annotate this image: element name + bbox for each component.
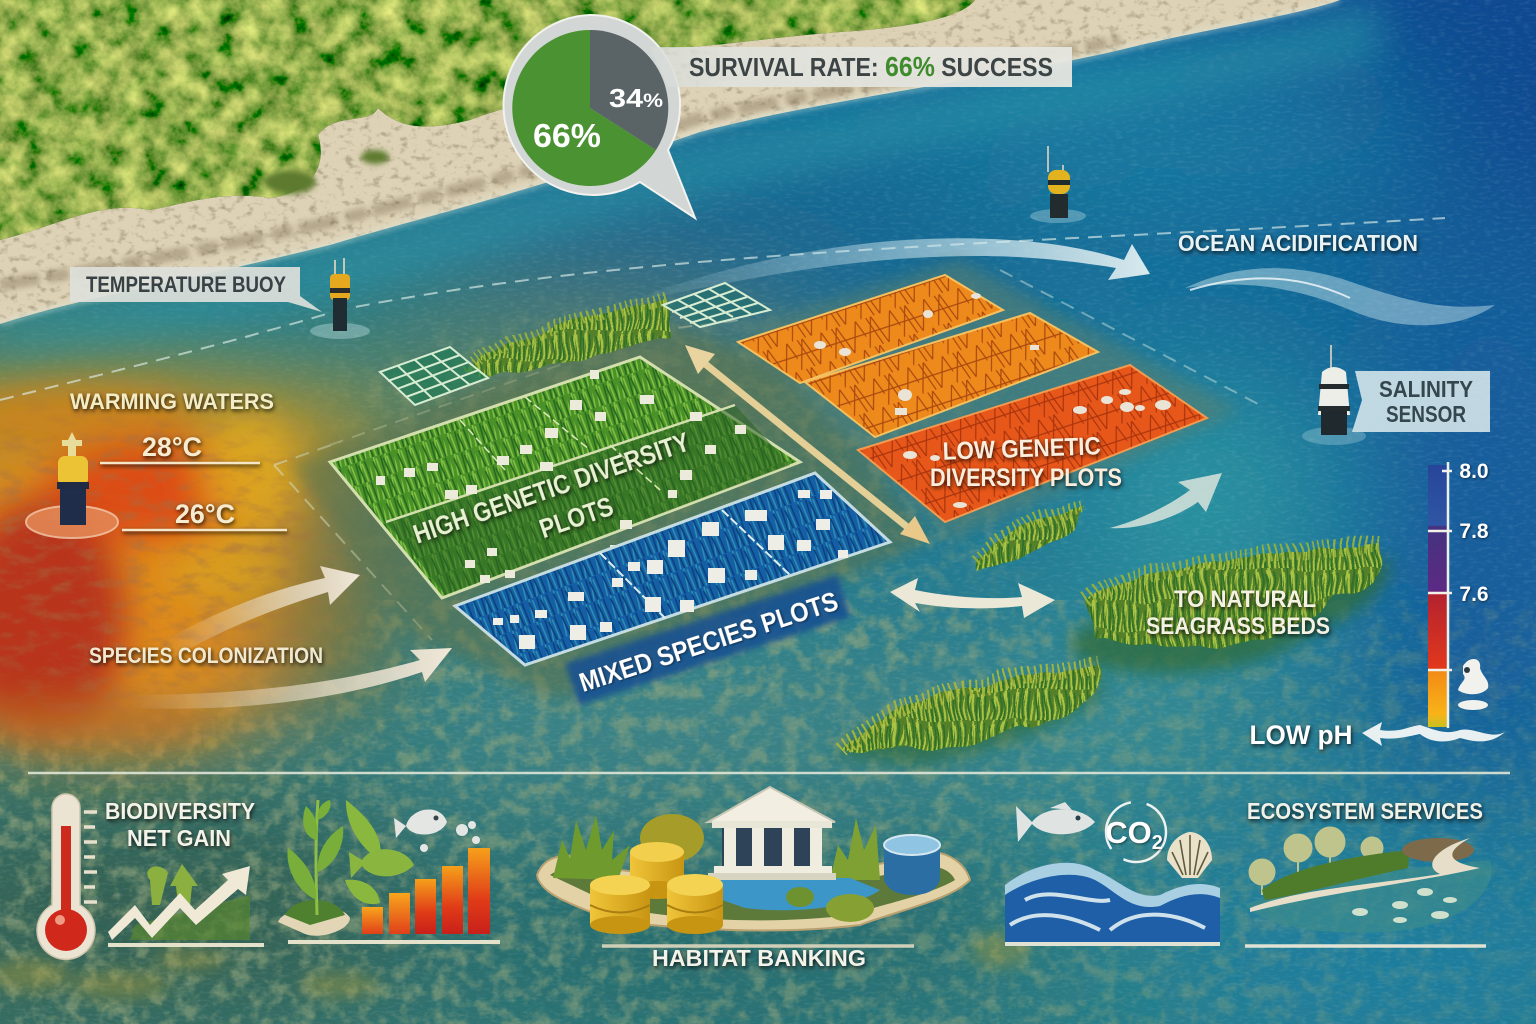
pond: [720, 878, 880, 910]
label: low pH: LOW pH: [1250, 720, 1352, 750]
icon: coins: [590, 842, 723, 934]
seabed halo around plots: [290, 260, 1240, 700]
growth trend: [108, 864, 250, 940]
buoy: salinity sensor: [1302, 345, 1366, 445]
icon: CO2: CO: [1105, 815, 1152, 850]
translucent wave: [1185, 268, 1495, 325]
survival rate banner: SURVIVAL RATE: 66% SUCCESS: [689, 51, 1053, 82]
plot markers: [376, 370, 746, 583]
heading: ECOSYSTEM SERVICES: [1247, 798, 1483, 824]
bottom-left golden seabed patches: [0, 932, 1030, 999]
seagrass beds: [835, 505, 1390, 765]
beach scrub: [264, 150, 389, 194]
icon: CO2: 2: [1152, 832, 1163, 854]
buoy: offshore: [1030, 146, 1086, 223]
label: to natural seagrass beds: [1146, 586, 1330, 640]
label: OCEAN ACIDIFICATION: [1178, 230, 1418, 256]
label: warming waters: WARMING WATERS: [70, 389, 274, 414]
heading: NET GAIN: [127, 825, 231, 851]
label: to natural seagrass beds: SEAGRASS BEDS: [1146, 613, 1330, 640]
label: low genetic diversity plots: DIVERSITY PLOTS: [930, 464, 1122, 492]
icon: green fish: [349, 849, 414, 878]
quadrat grid: top: [663, 283, 770, 327]
label: species colonization: SPECIES COLONIZATION: [89, 643, 323, 668]
buoy: warming waters: [26, 432, 118, 538]
buoy: temperature: [310, 258, 370, 339]
label: low genetic diversity plots: LOW GENETIC: [942, 432, 1101, 466]
bed: lower: [835, 665, 1105, 765]
icon: CO2: [1105, 802, 1166, 862]
label: salinity sensor: SALINITY: [1379, 376, 1473, 402]
forest: [0, 0, 975, 240]
icon: shell: [1167, 832, 1212, 878]
temperature reading: 26: 26°C: [175, 499, 235, 529]
label: low genetic diversity plots: [930, 432, 1122, 492]
diagonal double arrow between plots: [685, 345, 930, 544]
icon: bank temple: [708, 787, 836, 880]
speech bubble: [504, 15, 695, 218]
tick label: 7.6: 7.6: [1459, 583, 1489, 606]
ocean acidification: [1178, 230, 1495, 325]
grass tufts: [553, 815, 630, 880]
panel: species and bars: [278, 800, 500, 942]
label: habitat banking: HABITAT BANKING: [652, 945, 866, 971]
temperature reading: 28: 28°C: [142, 432, 202, 462]
panel: habitat banking: [537, 787, 970, 971]
icon: white fish: [394, 810, 480, 852]
seagrass patch: upper: [462, 300, 672, 378]
tick label: 7.8: 7.8: [1459, 520, 1489, 543]
bed: large right: [1070, 545, 1390, 673]
label: mixed species plots: MIXED SPECIES PLOTS: [576, 586, 842, 698]
big current arrow: [620, 238, 1150, 305]
label: salinity sensor: [1352, 371, 1490, 432]
bar chart: [362, 848, 490, 934]
label: high genetic diversity plots: HIGH GENETIC DIVERSITY: [409, 427, 693, 549]
bed: near plots: [975, 505, 1085, 570]
survival rate banner: [650, 47, 1072, 87]
waves: [1005, 863, 1220, 943]
pie label: 34: 34 %: [609, 83, 663, 113]
colour bar: [1428, 465, 1448, 727]
label: temperature buoy: TEMPERATURE BUOY: [86, 272, 286, 297]
heading: BIODIVERSITY: [105, 798, 255, 824]
label: temperature buoy: [70, 267, 322, 312]
pie: 34 percent: [590, 30, 668, 150]
two-way arrow: [890, 578, 1055, 618]
icon: plant: [278, 800, 381, 936]
pie: 66 percent: [512, 30, 656, 186]
shallow turquoise shore: [0, 0, 1380, 350]
panel: ocean carbon services: [1005, 802, 1220, 944]
pie callout: [504, 15, 695, 218]
species arrow upper: [165, 566, 360, 660]
warming water heat zone: [0, 360, 410, 760]
panel: ecosystem services: [1245, 798, 1492, 946]
plot markers: [814, 293, 1171, 508]
icon: shell: [1458, 659, 1488, 710]
icon: thermometer: [37, 794, 97, 959]
label band: [386, 405, 790, 595]
plots: low genetic diversity: [738, 275, 1207, 522]
dashed monitoring boundary: [0, 218, 1445, 640]
species arrow lower: [130, 648, 452, 709]
island: [537, 852, 970, 930]
icon: fish: [1016, 802, 1095, 842]
label: high genetic diversity plots: PLOTS: [535, 491, 617, 544]
tick label: 8.0: 8.0: [1459, 460, 1489, 483]
plots: high genetic diversity: [330, 357, 800, 598]
label: high genetic diversity plots: [409, 427, 705, 584]
divider: [28, 772, 1510, 774]
plot markers: [493, 490, 848, 649]
arrow to sensor: [1110, 473, 1222, 528]
quadrat grid: left: [380, 347, 488, 405]
coastal island illustration: [1245, 827, 1492, 933]
panel: biodiversity net gain: [37, 794, 264, 959]
flow arrows: [130, 473, 1222, 709]
label: to natural seagrass beds: TO NATURAL: [1174, 586, 1316, 613]
coastline: [0, 0, 1380, 350]
heading: [105, 798, 255, 851]
pH scale: [1250, 460, 1505, 750]
icon: water jar: [884, 835, 940, 895]
label: salinity sensor: SENSOR: [1386, 401, 1466, 427]
low pH wave arrow: [1362, 722, 1505, 746]
plots: mixed species: [455, 473, 890, 665]
pie label: 66: 66%: [533, 117, 601, 154]
sand beach: [0, 0, 1340, 324]
